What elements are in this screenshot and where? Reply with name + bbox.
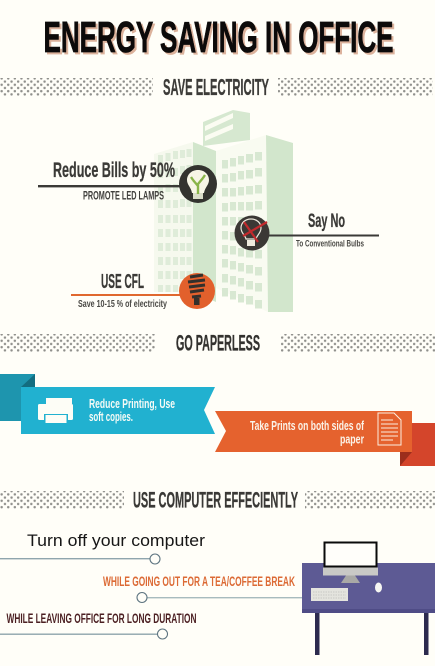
icon: keyboard: [311, 588, 348, 601]
callout: use CFL: Save 10-15 % of electricity: [78, 298, 167, 310]
heading: save electricity: [0, 74, 433, 100]
item: tea/coffee break: WHILE GOING OUT FOR A TEA/COFFEE BREAK: [103, 574, 295, 589]
callout: reduce bills: PROMOTE LED LAMPS: [83, 190, 164, 202]
item: turn off your computer: [0, 531, 205, 564]
icon: crossed bulb: [234, 216, 270, 250]
ribbon: take prints: Take Prints on both sides of: [250, 418, 364, 433]
ribbon: take prints: [215, 411, 435, 466]
heading: use computer efficiently: [0, 488, 435, 512]
callout: use CFL: [71, 270, 215, 310]
heading: go paperless: [0, 330, 435, 356]
icon: LED lamp: [179, 165, 217, 203]
icon: document: [378, 413, 401, 445]
item: long duration: WHILE LEAVING OFFICE FOR LONG DURATION: [6, 610, 197, 626]
ribbon: take prints: paper: [340, 432, 364, 446]
illustration: desk with computer: [302, 542, 435, 655]
icon: mouse: [375, 582, 382, 592]
heading: save electricity: SAVE ELECTRICITY: [163, 74, 269, 100]
callout: say no: [234, 210, 379, 250]
callout: say no: To Conventional Bulbs: [296, 238, 364, 250]
ribbon: reduce printing: Reduce Printing, Use: [89, 396, 175, 411]
icon: monitor: [323, 542, 378, 583]
item: long duration: [0, 610, 197, 639]
callout: reduce bills: [38, 159, 217, 203]
ribbon: reduce printing: [0, 374, 215, 434]
illustration: office buildings: [154, 110, 293, 312]
item: turn off your computer: Turn off your computer: [27, 531, 205, 550]
callout: use CFL: USE CFL: [101, 270, 144, 293]
callout: say no: Say No: [308, 210, 345, 232]
item: tea/coffee break: [103, 574, 303, 602]
callout: reduce bills: Reduce Bills by 50%: [53, 159, 175, 182]
heading: go paperless: GO PAPERLESS: [176, 330, 260, 356]
ribbon: reduce printing: soft copies.: [89, 409, 133, 424]
icon: CFL bulb: [179, 273, 215, 309]
icon: printer: [38, 398, 73, 423]
